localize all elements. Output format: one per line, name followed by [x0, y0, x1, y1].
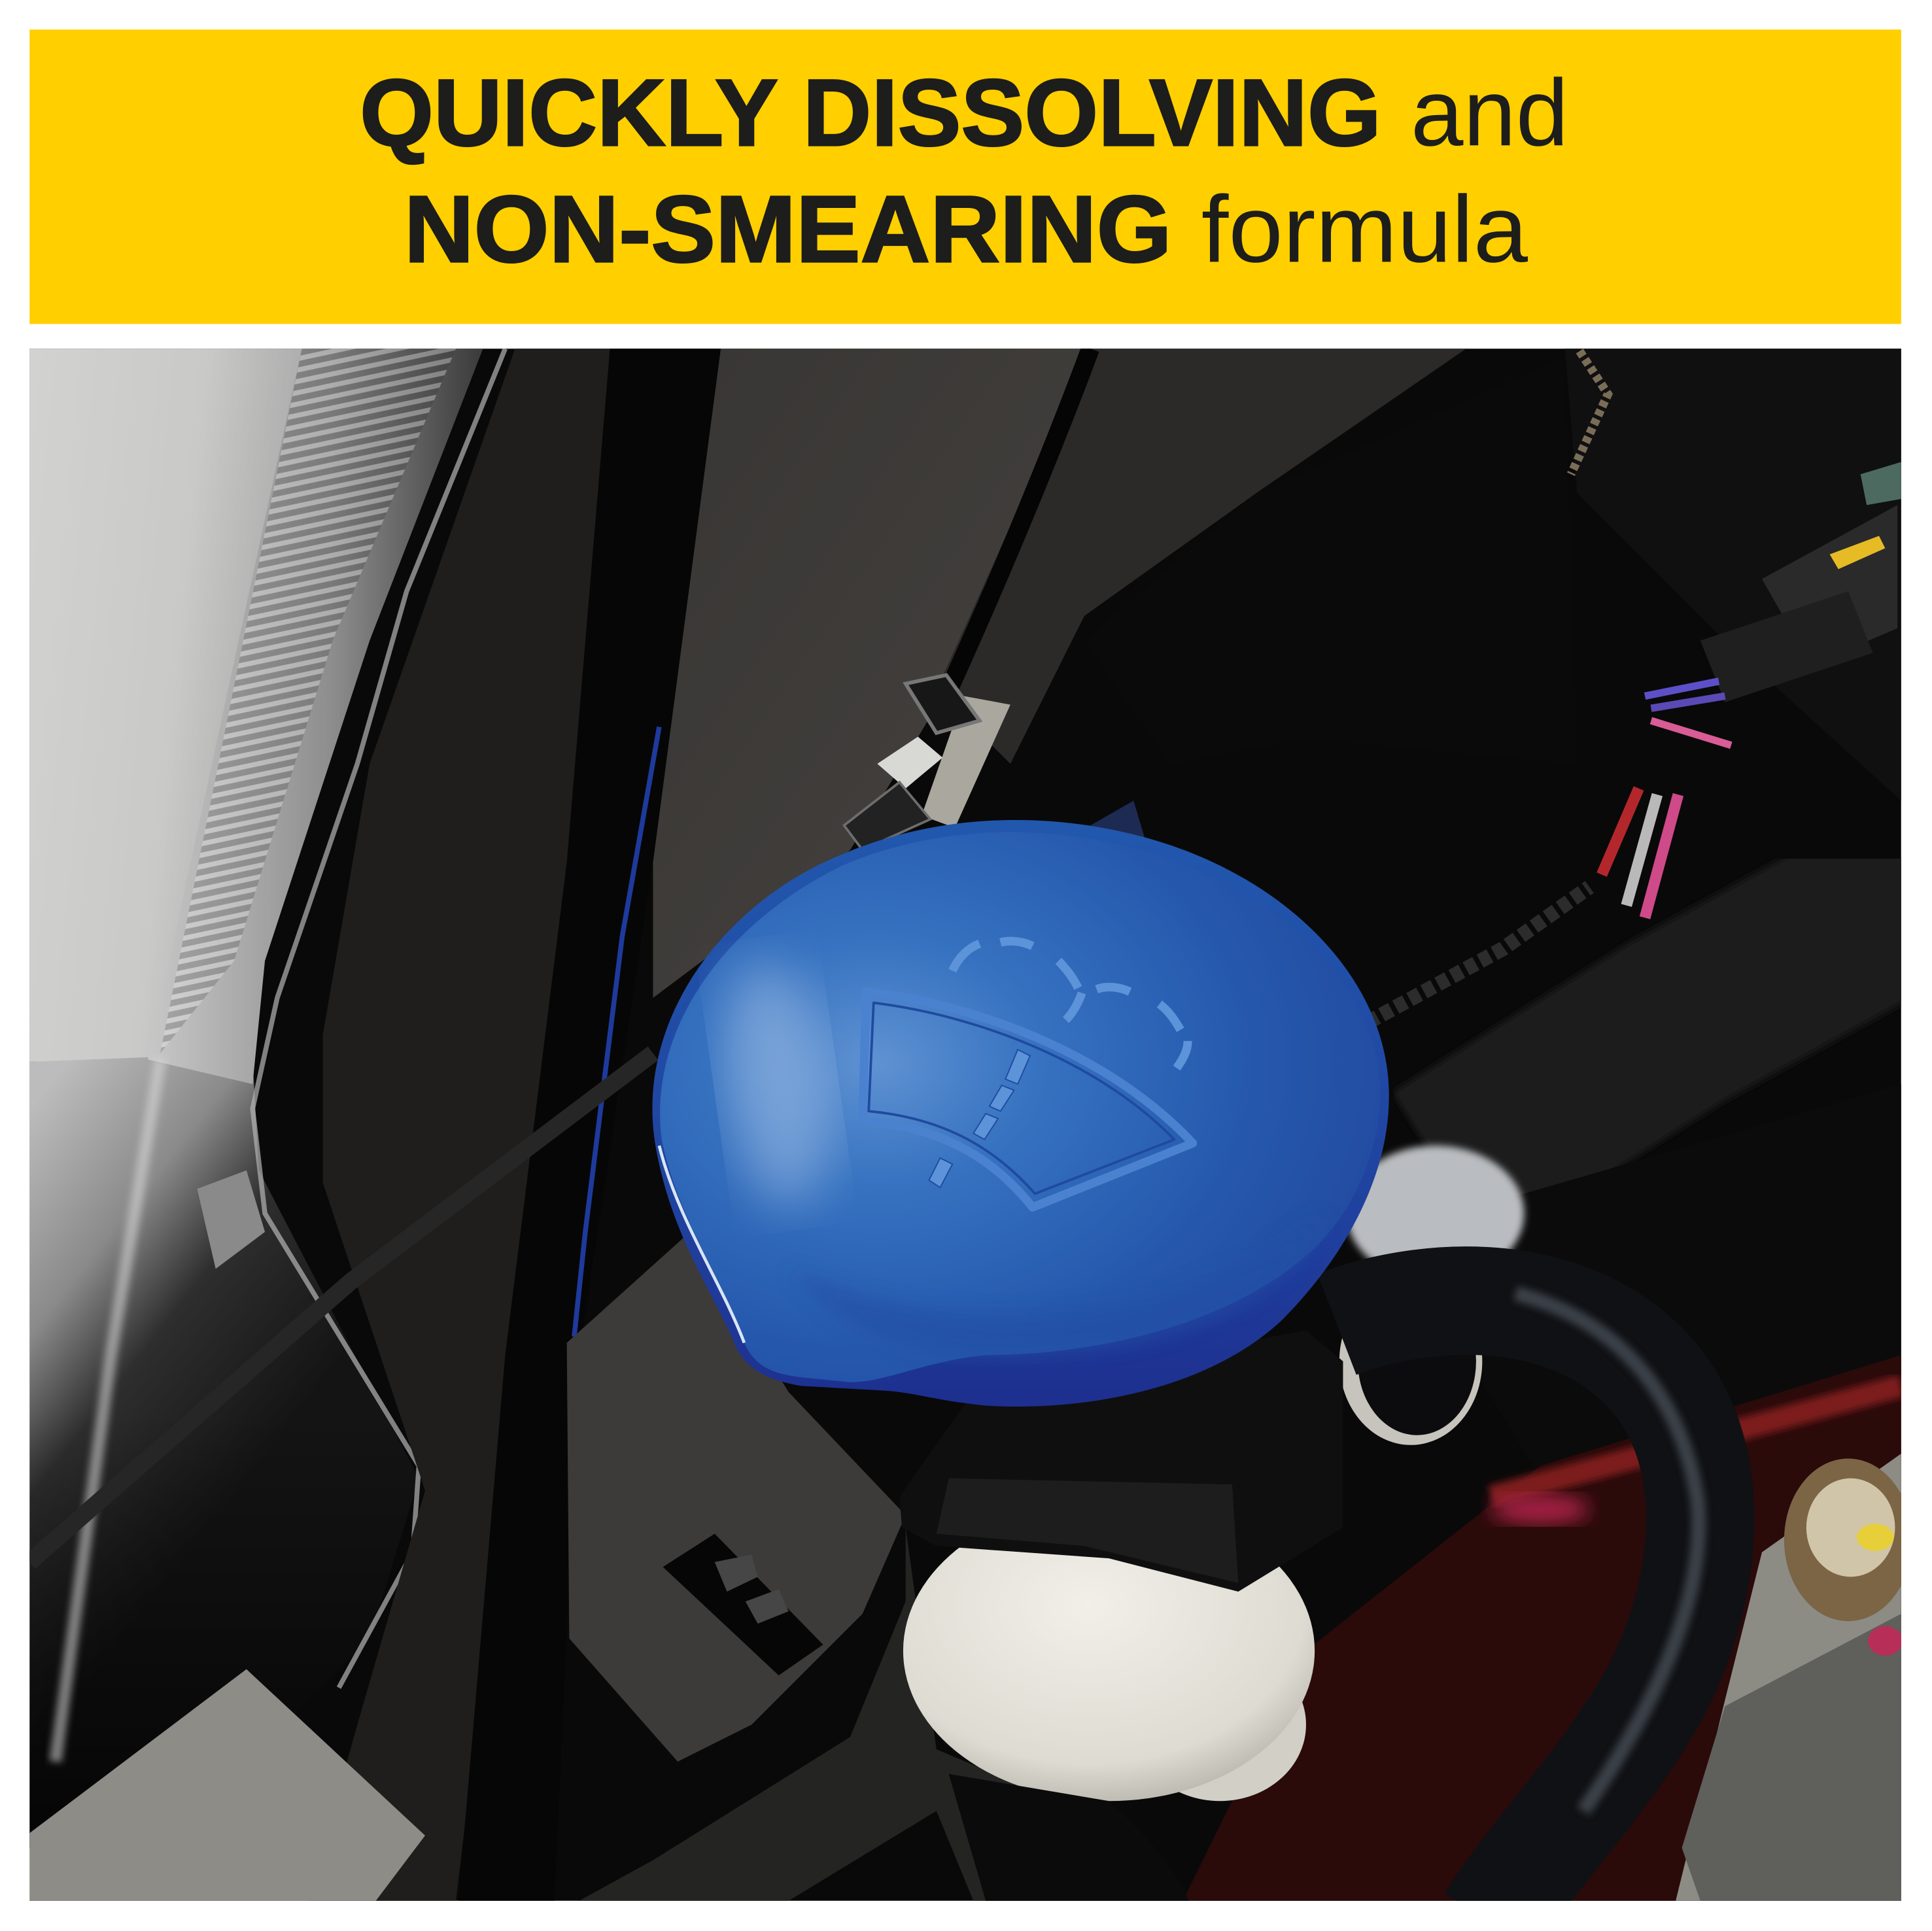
lower glass shading: [29, 1528, 348, 1848]
black rubber hose: [1337, 1293, 1700, 1922]
red white pink wires: [1602, 789, 1678, 917]
chrome ribbed headlight strip: [148, 349, 483, 1084]
lower right dark block: [1392, 1084, 1901, 1478]
silver plate lower left: [29, 1669, 425, 1901]
chrome lower streak: [56, 1059, 160, 1762]
panel: engine bay photo illustration: [29, 349, 1922, 1922]
dark upper right panel: [937, 349, 1466, 764]
embossed wiper blade: [929, 1050, 1030, 1188]
embossed wiper fan: [863, 992, 1193, 1207]
bracket slot: [663, 1533, 823, 1675]
connector with yellow tab: [1700, 462, 1901, 702]
blue reflection sliver: [574, 726, 659, 1337]
glossy left highlight: [708, 955, 844, 1213]
silver bolt canister: [1676, 1454, 1912, 1901]
small headlight tab: [197, 1171, 265, 1269]
grey bracket under cap: [567, 1232, 906, 1762]
icon: blue washer fluid cap: [652, 820, 1389, 1407]
white washer bottle: [903, 1501, 1315, 1901]
dark blue ragged object behind cap: [1090, 801, 1148, 863]
heading line 2: NON-SMEARING: [404, 176, 1172, 282]
white tube fitting behind cap: [1339, 1146, 1524, 1445]
panel: yellow heading banner: [29, 29, 1901, 324]
embossed spray arcs: [952, 941, 1188, 1068]
grey plastic panel: [653, 349, 1090, 998]
heading line 1: QUICKLY DISSOLVING: [360, 60, 1381, 165]
black vertical column: [458, 349, 721, 1901]
thin black cable: [29, 1053, 653, 1562]
cap rim: [652, 820, 1389, 1407]
cable to clip: [949, 349, 1090, 690]
pink reflection: [1491, 1494, 1589, 1524]
top right engine housing: [1565, 349, 1901, 801]
lower darker band: [789, 1214, 1324, 1355]
red floor: [1183, 1355, 1901, 1901]
cap top surface: [660, 832, 1380, 1382]
heading line 1: and: [1411, 60, 1568, 165]
dark engine shapes: [1084, 357, 1577, 764]
dark wire bundle: [1368, 887, 1589, 1023]
headlight glass lower: [29, 1057, 419, 1848]
heading line 2: formula: [1201, 176, 1528, 282]
collar facet highlight: [937, 1478, 1238, 1583]
heading line 2: [404, 176, 1528, 282]
bracket lower strip: [579, 1528, 1183, 1901]
chain detail: [1571, 351, 1608, 474]
headlight glass upper: [29, 349, 308, 1062]
purple and pink wires: [1645, 681, 1731, 745]
red strip highlight: [1491, 1386, 1901, 1497]
metal clip bracket: [844, 675, 1010, 850]
spout edge highlight: [659, 1146, 744, 1342]
headlight clear edge highlight: [252, 349, 505, 1688]
big dark pipe right: [1441, 887, 1922, 1171]
black neck collar: [899, 1331, 1343, 1592]
black inner headlight panel: [308, 349, 610, 1901]
